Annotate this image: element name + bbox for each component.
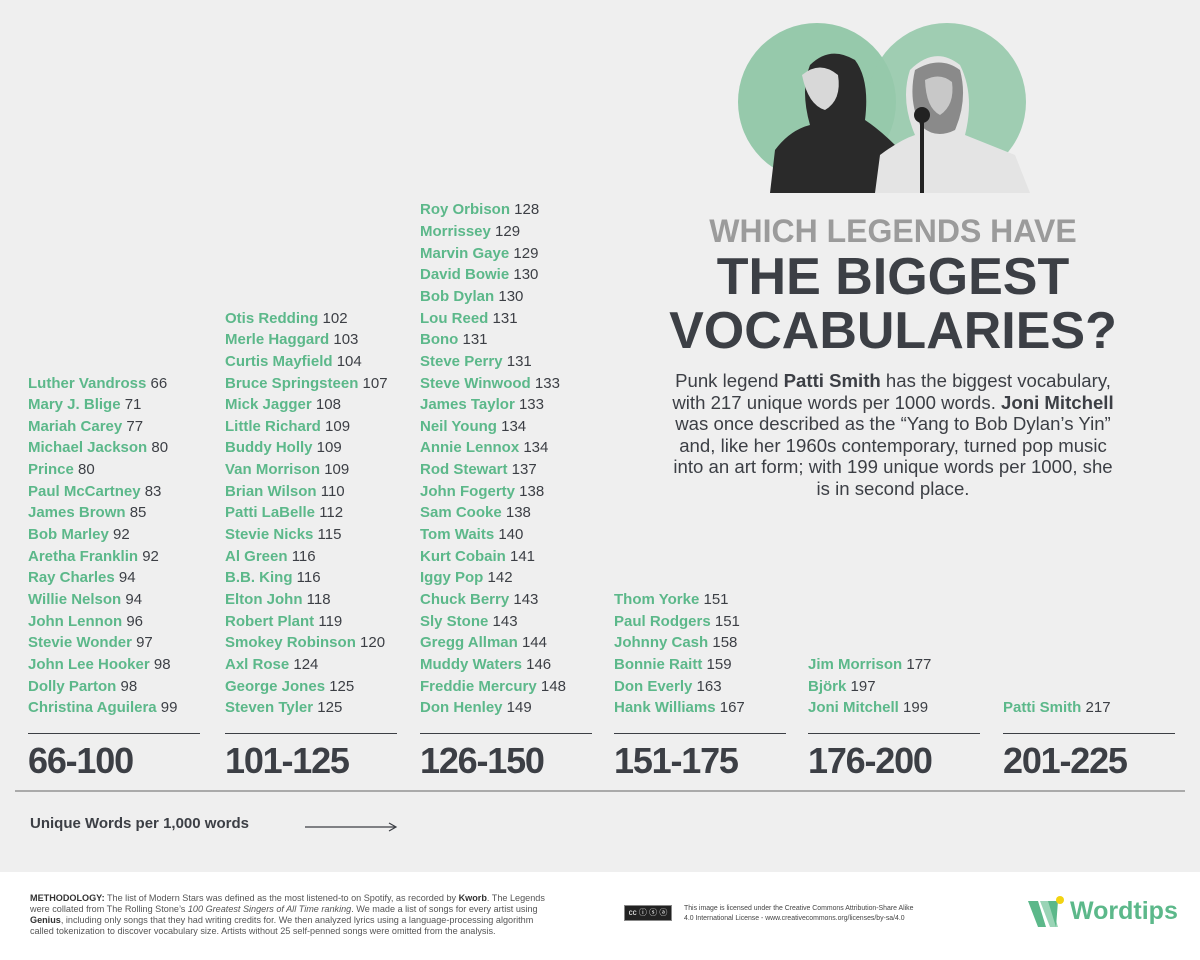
column: 101-125: George Jones 125 <box>225 678 354 695</box>
column: 101-125: Robert Plant 119 <box>225 613 342 630</box>
column: 101-125: Little Richard 109 <box>225 418 350 435</box>
title: THE BIGGEST <box>717 248 1069 306</box>
text: 126-150 <box>420 740 544 781</box>
column: 66-100: Paul McCartney 83 <box>28 483 161 500</box>
column: 126-150: Rod Stewart 137 <box>420 461 537 478</box>
column: 101-125: Elton John 118 <box>225 591 331 608</box>
column: 66-100: Christina Aguilera 99 <box>28 699 178 716</box>
column: 101-125: Van Morrison 109 <box>225 461 349 478</box>
column: 101-125: Mick Jagger 108 <box>225 396 341 413</box>
column: 126-150: Chuck Berry 143 <box>420 591 538 608</box>
column: 126-150: Muddy Waters 146 <box>420 656 551 673</box>
column: 126-150: Don Henley 149 <box>420 699 532 716</box>
description text: with 217 unique words per 1000 words. Joni Mitchell <box>672 392 1114 413</box>
license text: 4.0 International License - www.creativecommons.org/licenses/by-sa/4.0 <box>684 915 905 922</box>
column: 151-175: Paul Rodgers 151 <box>614 613 740 630</box>
column: 151-175: Johnny Cash 158 <box>614 634 737 651</box>
logo: Wordtips <box>1028 896 1178 927</box>
column: 126-150: Tom Waits 140 <box>420 526 523 543</box>
column: 101-125: Curtis Mayfield 104 <box>225 353 362 370</box>
license text <box>684 904 914 922</box>
column: 101-125: Stevie Nicks 115 <box>225 526 341 543</box>
column: 101-125: Bruce Springsteen 107 <box>225 374 388 392</box>
column: 201-225: Patti Smith 217 <box>1003 699 1111 716</box>
title: WHICH LEGENDS HAVE <box>709 213 1077 249</box>
column: 66-100: James Brown 85 <box>28 504 146 521</box>
column: 126-150: Bono 131 <box>420 331 488 348</box>
description text: Punk legend Patti Smith has the biggest vocabulary, <box>675 370 1111 391</box>
text: 201-225 <box>1003 740 1127 781</box>
column: 176-200: Joni Mitchell 199 <box>808 699 928 716</box>
column: 66-100: Luther Vandross 66 <box>28 374 167 392</box>
column: 126-150: Sam Cooke 138 <box>420 504 531 521</box>
column: 176-200: Jim Morrison 177 <box>808 656 931 673</box>
text: 101-125 <box>225 740 349 781</box>
title: VOCABULARIES? <box>669 302 1117 360</box>
column: 126-150: Roy Orbison 128 <box>420 201 539 218</box>
icon: cc license <box>624 905 672 921</box>
column: 66-100: Ray Charles 94 <box>28 569 136 586</box>
column: 101-125: Otis Redding 102 <box>225 310 348 327</box>
column: 66-100: Bob Marley 92 <box>28 526 130 543</box>
column: 126-150: Annie Lennox 134 <box>420 439 548 456</box>
column: 151-175: Hank Williams 167 <box>614 699 745 716</box>
column: 126-150: Kurt Cobain 141 <box>420 548 535 565</box>
methodology <box>30 893 545 936</box>
column: 126-150: John Fogerty 138 <box>420 483 544 500</box>
column: 126-150: Gregg Allman 144 <box>420 634 547 651</box>
column: 66-100: Stevie Wonder 97 <box>28 634 153 651</box>
column: 101-125: B.B. King 116 <box>225 569 321 586</box>
column: 126-150: Marvin Gaye 129 <box>420 245 538 262</box>
column: 126-150: Lou Reed 131 <box>420 310 518 327</box>
column: 126-150: David Bowie 130 <box>420 266 538 283</box>
column: 126-150: Neil Young 134 <box>420 418 526 435</box>
column: 101-125: Steven Tyler 125 <box>225 699 342 716</box>
column: 66-100: Mary J. Blige 71 <box>28 396 141 413</box>
column: 126-150: Iggy Pop 142 <box>420 569 513 586</box>
methodology: Genius, including only songs that they had writing credits for. We then analyzed lyrics using a language-processing algorithm <box>30 915 533 925</box>
methodology: METHODOLOGY: The list of Modern Stars was defined as the most listened-to on Spotify, as recorded by Kworb. The Legends <box>30 893 545 903</box>
logo: Wordtips: Wordtips <box>1070 897 1178 925</box>
column: 151-175: Bonnie Raitt 159 <box>614 656 732 673</box>
column: 66-100: John Lennon 96 <box>28 613 143 630</box>
column: 126-150: Steve Winwood 133 <box>420 374 560 392</box>
icon: cc license: cc ⓘ ⓢ ⓐ <box>629 908 667 917</box>
text: 176-200 <box>808 740 932 781</box>
column: 126-150: Bob Dylan 130 <box>420 288 523 305</box>
column: 126-150 <box>420 201 566 716</box>
column: 66-100: Aretha Franklin 92 <box>28 548 159 565</box>
column: 126-150: Morrissey 129 <box>420 223 520 240</box>
range labels <box>28 740 1127 781</box>
description text: into an art form; with 199 unique words per 1000, she <box>673 456 1113 477</box>
axis label: Unique Words per 1,000 words <box>30 815 249 832</box>
column: 126-150: Steve Perry 131 <box>420 353 532 370</box>
column: 101-125: Al Green 116 <box>225 548 316 565</box>
column: 126-150: James Taylor 133 <box>420 396 544 413</box>
column: 151-175: Thom Yorke 151 <box>614 591 729 608</box>
column: 101-125 <box>225 310 388 716</box>
column: 101-125: Smokey Robinson 120 <box>225 634 385 651</box>
column: 101-125: Patti LaBelle 112 <box>225 504 343 521</box>
title <box>669 213 1117 360</box>
description text: is in second place. <box>816 478 969 499</box>
license text: This image is licensed under the Creative Commons Attribution-Share Alike <box>684 905 913 912</box>
column: 151-175: Don Everly 163 <box>614 678 722 695</box>
photos: Patti Smith and Joni Mitchell <box>738 23 1030 193</box>
methodology: were collated from The Rolling Stone’s 100 Greatest Singers of All Time ranking. We made a list of songs for every artist using <box>30 904 538 914</box>
description text: and, like her 1960s contemporary, turned pop music <box>679 435 1107 456</box>
description text: was once described as the “Yang to Bob Dylan’s Yin” <box>675 413 1111 434</box>
text: 66-100 <box>28 740 133 781</box>
column: 176-200 <box>808 656 931 716</box>
column: 66-100: Willie Nelson 94 <box>28 591 142 608</box>
description text <box>672 370 1114 499</box>
column: 66-100: Prince 80 <box>28 461 95 478</box>
column: 66-100: Michael Jackson 80 <box>28 439 168 456</box>
column: 151-175 <box>614 591 745 716</box>
text: 151-175 <box>614 740 738 781</box>
column: 101-125: Merle Haggard 103 <box>225 331 358 348</box>
column: 66-100: John Lee Hooker 98 <box>28 656 171 673</box>
column: 101-125: Axl Rose 124 <box>225 656 318 673</box>
column: 66-100 <box>28 374 178 716</box>
column: 126-150: Sly Stone 143 <box>420 613 518 630</box>
column: 66-100: Dolly Parton 98 <box>28 678 137 695</box>
column: 101-125: Buddy Holly 109 <box>225 439 342 456</box>
methodology: called tokenization to discover vocabulary size. Artists without 25 self-penned songs were omitted from the analysis. <box>30 926 496 936</box>
column: 66-100: Mariah Carey 77 <box>28 418 143 435</box>
column: 126-150: Freddie Mercury 148 <box>420 678 566 695</box>
arrow <box>305 822 398 832</box>
column: 101-125: Brian Wilson 110 <box>225 483 345 500</box>
column: 176-200: Björk 197 <box>808 678 876 695</box>
